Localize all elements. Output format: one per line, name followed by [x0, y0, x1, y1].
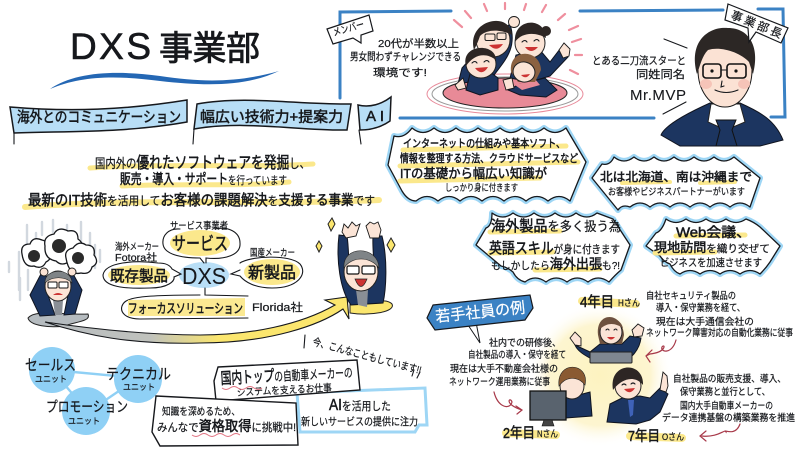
description text with highlights: 最新のIT技術を活用してお客様の課題解決を支援する事業です	[28, 192, 375, 209]
tag: division head	[725, 4, 788, 43]
label: 2nd year N: Nさん	[537, 429, 558, 440]
callout: web meetings	[646, 219, 780, 274]
label: 4th year H: 4年目	[580, 294, 614, 311]
note: AI services	[301, 397, 418, 428]
text: 2nd year: 社内での研修後、	[489, 337, 561, 349]
text: 4th year: 現在は大手通信会社の	[656, 316, 754, 328]
callout: IT basics	[388, 128, 586, 201]
text: 7th year: 保守業務と並行として、	[680, 386, 770, 398]
illustration: worried man with clouds	[9, 220, 100, 327]
technical unit	[106, 355, 171, 403]
product diagram	[103, 220, 303, 319]
label: 2nd year N: 2年目	[503, 425, 535, 442]
existing products bubble	[103, 241, 181, 288]
note: certification: 知識を深めるため、	[162, 405, 240, 418]
callout: Hokkaido to Okinawa: お客様やビジネスパートナーがいます	[608, 186, 745, 198]
text: 2nd year: 現在は大手不動産会社様の	[450, 363, 558, 375]
illustration: 2nd year employee	[530, 367, 592, 426]
members text: 20代が半数以上	[378, 37, 459, 50]
DXS hub: DXS	[182, 263, 226, 289]
callout: English skills: 英語スキルが身に付きます	[489, 239, 620, 257]
service bubble: サービス	[172, 234, 228, 254]
text: 4th year: 自社セキュリティ製品の	[646, 290, 736, 302]
text: 7th year: 自社製品の販売支援、導入、	[673, 373, 786, 385]
callout: IT basics: インターネットの仕組みや基本ソフト、	[403, 136, 565, 150]
text: 2nd year: 自社製品の導入・保守を経て	[468, 349, 566, 361]
curly arrows	[494, 340, 740, 441]
tag: members	[327, 15, 373, 44]
label: 2nd year N	[503, 425, 558, 442]
note: car manufacturer	[214, 360, 427, 432]
arrow: grey to yellow growth	[45, 297, 349, 343]
callout: web meetings: ビジネスを加速させます	[660, 257, 762, 269]
focus solution bubble: Florida社	[252, 300, 303, 314]
focus solution bubble	[122, 288, 303, 319]
sales unit: ユニット	[35, 374, 67, 384]
text: 7th year	[662, 373, 795, 424]
tag: division head: 事業部長	[729, 9, 784, 41]
heading: what we do now	[304, 335, 423, 378]
existing products bubble: 海外メーカー	[115, 241, 159, 253]
illustration: happy man	[316, 218, 395, 314]
title swoosh underline	[50, 71, 279, 89]
heading: what we do now: 今、こんなこともしています!!	[311, 335, 423, 377]
text: 4th year: 導入・保守業務を経て、	[656, 302, 745, 314]
blue frame	[340, 9, 785, 118]
technical unit: テクニカル	[106, 366, 171, 383]
note: car manufacturer: 国内トップの自動車メーカーの	[220, 363, 353, 388]
new products bubble: 新製品	[248, 264, 296, 282]
tag: young employee examples	[427, 295, 533, 343]
text: 2nd year: ネットワーク運用業務に従事	[449, 376, 550, 388]
illustration: 4th year employee	[570, 317, 644, 363]
note: AI services: 新しいサービスの提供に注力	[301, 415, 418, 428]
illustration: team in pink pool	[427, 3, 583, 114]
members text: 環境です!	[373, 67, 427, 79]
focus solution bubble: フォーカスソリューション	[128, 301, 243, 316]
illustration: division head portrait	[661, 28, 783, 146]
title: DXS	[70, 26, 151, 67]
callout: Hokkaido to Okinawa	[592, 157, 760, 210]
boss text: 同姓同名	[636, 67, 685, 81]
promotion unit	[46, 387, 128, 435]
callout: English skills	[476, 213, 630, 282]
unit diagram	[25, 347, 171, 435]
members text: 男女問わずチャレンジできる	[350, 50, 461, 63]
new products bubble: 国産メーカー	[250, 247, 295, 259]
label: 4th year H	[580, 294, 640, 311]
tag: young employee examples: 若手社員の例	[435, 299, 526, 326]
sales unit	[25, 347, 76, 393]
existing products bubble: 既存製品	[110, 268, 168, 285]
boss text: Mr.MVP	[630, 87, 686, 104]
new products bubble	[231, 247, 303, 288]
description text with highlights	[25, 154, 379, 209]
banner: wide technical skill	[193, 100, 351, 144]
boss text: とある二刀流スターと	[592, 55, 686, 67]
callout: English skills: 海外製品を多く扱う為	[491, 218, 621, 235]
label: 7th year O	[628, 428, 684, 445]
banner: overseas communication	[10, 100, 187, 144]
note: AI services: AIを活用した	[329, 397, 391, 414]
label: 4th year H: Hさん	[618, 298, 640, 309]
young employee glow	[528, 303, 672, 447]
illustration: 7th year employee	[607, 368, 668, 424]
boss text	[592, 39, 687, 114]
service bubble: サービス事業者	[170, 220, 228, 232]
callout: web meetings: 現地訪問を織り交ぜて	[654, 240, 770, 255]
callout: Hokkaido to Okinawa: 北は北海道、南は沖縄まで	[600, 169, 752, 184]
note: car manufacturer: システムを支えるお仕事	[236, 381, 332, 399]
tag: members: メンバー	[332, 19, 366, 39]
promotion unit: プロモーション	[46, 399, 128, 416]
banner: wide technical skill: 幅広い技術力+提案力	[200, 109, 343, 126]
text: 7th year: 国内大手自動車メーカーの	[680, 400, 773, 412]
banner: AI	[358, 97, 391, 144]
text: 4th year	[646, 290, 793, 339]
sales unit: セールス	[25, 357, 76, 374]
banner: overseas communication: 海外とのコミュニケーション	[17, 109, 181, 126]
description text with highlights: 国内外の優れたソフトウェアを発掘し、	[95, 154, 310, 172]
label: 7th year O: Oさん	[662, 432, 684, 443]
callout: English skills: もしかしたら海外出張も?!	[491, 256, 620, 272]
text: 2nd year	[449, 337, 566, 388]
service bubble	[163, 220, 240, 263]
description text with highlights: 販売・導入・サポートを行っています	[120, 171, 287, 187]
members text	[350, 37, 461, 79]
label: 7th year O: 7年目	[628, 428, 660, 445]
promotion unit: ユニット	[68, 416, 100, 426]
callout: IT basics: 情報を整理する方法、クラウドサービスなど	[400, 151, 578, 165]
callout: web meetings: Web会議、	[676, 224, 751, 240]
callout: IT basics: しっかり身に付きます	[445, 182, 518, 194]
existing products bubble: Fotora社	[115, 251, 157, 264]
note: certification	[152, 396, 298, 446]
banner: AI: AI	[366, 108, 384, 125]
technical unit: ユニット	[123, 382, 155, 392]
note: certification: みんなで資格取得に挑戦中!	[157, 418, 296, 434]
title	[70, 26, 260, 68]
callout: IT basics: ITの基礎から幅広い知識が	[400, 166, 547, 181]
title: 事業部	[159, 30, 260, 68]
